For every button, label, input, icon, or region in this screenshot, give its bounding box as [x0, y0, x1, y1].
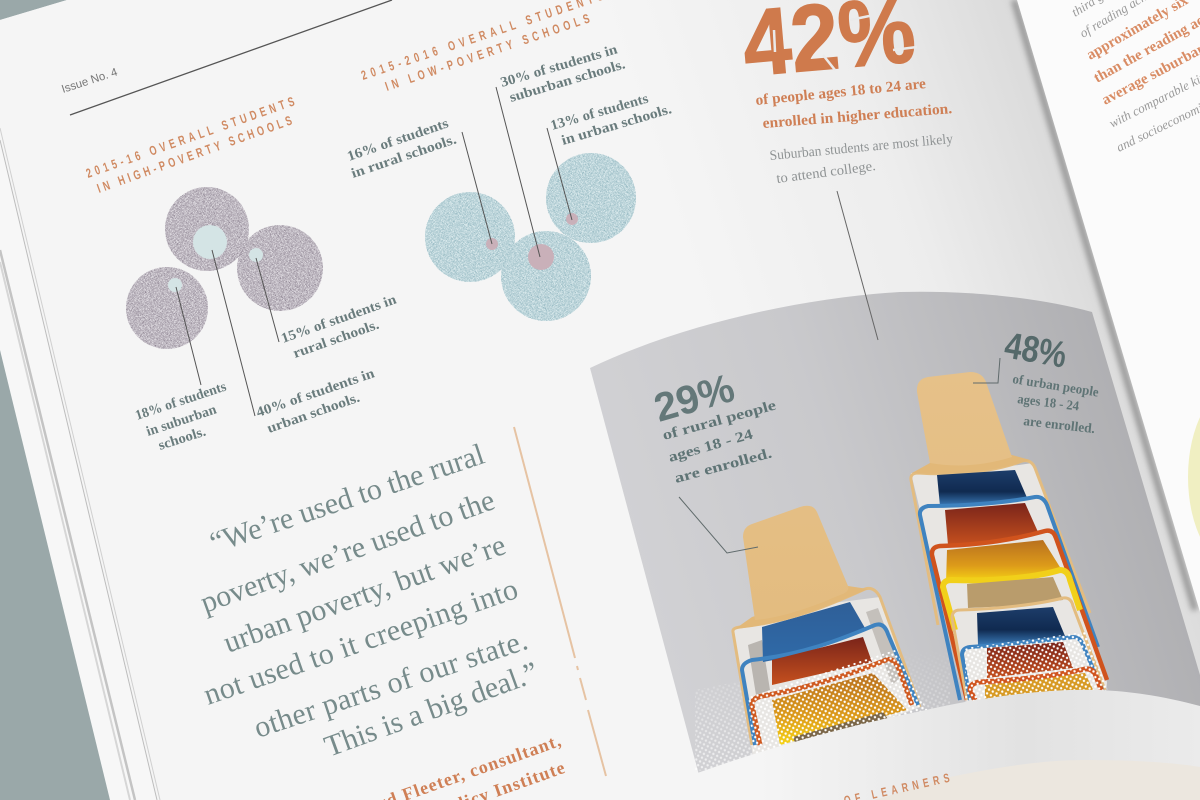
statistic caption: [755, 76, 953, 132]
labels: low-poverty bubbles: in rural schools.: [349, 132, 459, 182]
tan seat back: [967, 577, 1063, 608]
labels: high-poverty bubbles: rural schools.: [291, 318, 381, 362]
chart: high-poverty bubbles: [126, 187, 323, 416]
header rule: [70, 0, 392, 115]
labels: low-poverty bubbles: 13% of students: [549, 91, 651, 134]
statistic: 29% rural: [649, 366, 779, 487]
labels: low-poverty bubbles: 30% of students in: [499, 42, 619, 91]
statistic: 48% urban: [1002, 325, 1100, 436]
pull quote: “We’re used to the rural: [206, 438, 489, 560]
wood back: [917, 372, 1012, 465]
orange frame: [932, 531, 1107, 700]
wood seat lip: [735, 586, 868, 629]
labels: high-poverty bubbles: 40% of students in: [254, 366, 377, 421]
chair stack: urban: [911, 372, 1107, 705]
statistic: 48% urban: are enrolled.: [1023, 413, 1096, 436]
statistic note: Suburban students are most likely: [769, 132, 954, 164]
labels: high-poverty bubbles: schools.: [157, 425, 208, 454]
statistic: 29% rural: are enrolled.: [673, 446, 774, 487]
wood frame lower: [952, 598, 1105, 700]
red seat back lower: [987, 642, 1073, 678]
yellow frame: [943, 570, 1080, 630]
statistic: 48% urban: ages 18 - 24: [1017, 391, 1080, 414]
wood seat lip: [912, 455, 1030, 474]
panel: chairs background: [590, 292, 1200, 800]
callout line: rural chair: [679, 497, 758, 553]
orange frame lower: [970, 669, 1102, 700]
heading: high-poverty schools: IN HIGH-POVERTY SCHOOLS: [96, 114, 294, 196]
statistic caption: of people ages 18 to 24 are: [755, 76, 927, 109]
blue frame lower: [962, 637, 1103, 700]
navy seat back: [937, 470, 1028, 506]
wood frame: [911, 461, 1090, 625]
chair stack: rural: [733, 506, 920, 770]
labels: high-poverty bubbles: in suburban: [145, 402, 219, 440]
statistic: 29% rural: ages 18 - 24: [667, 426, 755, 466]
labels: high-poverty bubbles: 15% of students in: [279, 293, 399, 347]
lower interior: [950, 578, 1100, 705]
yellow seat back: [946, 540, 1063, 582]
right page text: [1069, 0, 1200, 155]
halftone floor: [695, 676, 950, 770]
statistic note: to attend college.: [776, 159, 877, 187]
tan lower band: [793, 712, 890, 748]
navy seat back lower: [977, 607, 1065, 645]
red seat back: [772, 637, 872, 685]
pull quote: not used to it creeping into: [199, 572, 522, 712]
yellow halftone circle: [1188, 385, 1200, 569]
yellow seat lower: [985, 673, 1098, 705]
pull quote: This is a big deal.”: [320, 656, 543, 764]
labels: low-poverty bubbles: in urban schools.: [560, 102, 673, 149]
page fold: lower sheet: [692, 690, 1200, 800]
labels: high-poverty bubbles: urban schools.: [265, 391, 362, 437]
blue frame: [742, 624, 918, 745]
red seat back: [945, 503, 1038, 545]
labels: high-poverty bubbles: 18% of students: [134, 379, 229, 424]
orange frame: [752, 660, 912, 745]
statistic: 29% rural: 29%: [649, 366, 739, 431]
statistic caption: enrolled in higher education.: [762, 101, 953, 132]
statistic: 48% urban: 48%: [1002, 325, 1070, 376]
frame body: [911, 463, 1107, 705]
chart: low-poverty bubbles: [425, 87, 636, 321]
labels: low-poverty bubbles: suburban schools.: [508, 57, 627, 106]
wood back: [743, 506, 848, 620]
pull quote: other parts of our state.: [250, 624, 532, 745]
panel: right page edge: [1014, 0, 1200, 612]
frame body: [733, 597, 920, 770]
pull quote: urban poverty, but we’re: [219, 528, 510, 660]
issue number: Issue No. 4: [60, 66, 120, 96]
labels: high-poverty bubbles: [134, 293, 399, 454]
yellow seat back: [772, 673, 907, 745]
beige image block: [875, 760, 1200, 800]
labels: low-poverty bubbles: 16% of students: [345, 116, 451, 165]
blue seat back: [762, 602, 865, 662]
pointer line to panel: [837, 191, 878, 340]
quote divider rule: [514, 427, 606, 776]
statistic: 29% rural: of rural people: [661, 397, 779, 444]
labels: low-poverty bubbles: [345, 42, 673, 182]
heading: high-poverty schools: 2015-16 OVERALL STUDENTS: [85, 95, 297, 181]
pull quote: poverty, we’re used to the: [196, 484, 499, 620]
blue frame upper: [920, 497, 1098, 700]
callout line: urban chair: [973, 358, 1000, 383]
statistic note: [769, 132, 954, 187]
wood frame: [733, 588, 920, 745]
statistic: 48% urban: of urban people: [1012, 371, 1100, 400]
pull quote: [196, 438, 543, 764]
heading: low-poverty schools: IN LOW-POVERTY SCHOOLS: [384, 12, 592, 94]
halftone over chairs: [748, 632, 1112, 770]
